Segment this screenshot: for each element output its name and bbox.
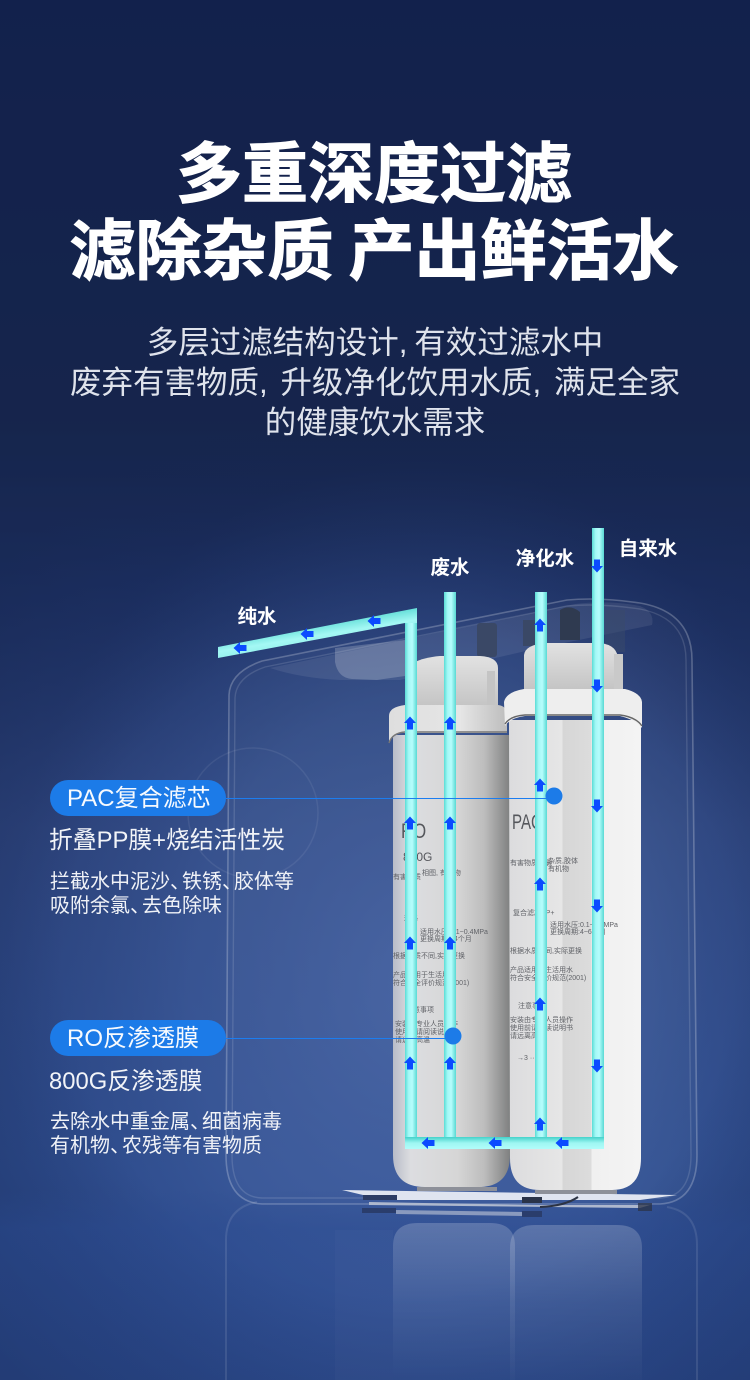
leader line (226, 1038, 447, 1040)
printed specification text: 更换周期:24个月 (420, 934, 472, 943)
callout: PAC filter (49, 780, 562, 917)
printed specification text (510, 856, 618, 1062)
tube: waste water (444, 592, 456, 1149)
marker dot (444, 1028, 462, 1044)
tube label: tap water: 自来水 (619, 532, 678, 561)
callout: RO membrane: 有机物、农残等有害物质 (50, 1134, 262, 1157)
tube label: waste water: 废水 (430, 551, 470, 580)
printed specification text: 杂质,胶体 (548, 856, 578, 865)
tube: purified water (535, 592, 547, 1149)
printed specification text: →1 (403, 1058, 414, 1065)
subtitle: 废弃有害物质, 升级净化饮用水质, 满足全家 (70, 364, 680, 400)
tube: pure water (218, 608, 417, 1149)
title: 滤除杂质 产出鲜活水 (70, 198, 678, 294)
filter: RO membrane cartridge (389, 656, 510, 1191)
printed specification text: 产品适用于生活用水 (510, 965, 573, 974)
printed specification text: 请远离高温 (510, 1031, 545, 1040)
subtitle: 的健康饮水需求 (265, 404, 485, 440)
subtitle: 多层过滤结构设计, 有效过滤水中 (147, 324, 603, 360)
subtitle (70, 324, 680, 440)
printed specification text: 安装由专业人员操作 (395, 1019, 458, 1028)
tube: tap water (592, 528, 604, 1149)
printed specification text: 注意事项 (406, 1005, 434, 1014)
floor reflection (226, 1202, 697, 1380)
printed specification text: 有害物质 (393, 872, 421, 881)
flow arrows (234, 560, 603, 1149)
filter: PAC composite cartridge (504, 643, 642, 1194)
printed specification text: 复合滤芯PP+ (513, 908, 554, 917)
printed specification text (393, 868, 488, 1065)
title (70, 121, 678, 294)
faint circle (188, 748, 318, 878)
RO label: RO (401, 820, 426, 844)
tube: bottom connector (405, 1137, 604, 1149)
printed specification text: 安装由专业人员操作 (510, 1015, 573, 1024)
base plate (342, 1190, 677, 1217)
marker dot (546, 788, 562, 804)
printed specification text: 请远离高温 (395, 1035, 430, 1044)
callout: RO membrane (49, 1020, 462, 1157)
PAC label: PAC (512, 809, 542, 834)
leader line (226, 798, 548, 800)
printed specification text: 使用前请阅读说明书 (395, 1027, 458, 1036)
printed specification text: 适用水压:0.1~0.4MPa (550, 920, 618, 929)
callout: PAC filter: 吸附余氯、去色除味 (50, 894, 222, 917)
description: 去除水中重金属、细菌病毒 (50, 1110, 282, 1133)
printed specification text: 根据水质不同,实际更换 (510, 946, 582, 955)
printed specification text: 规格 (404, 913, 418, 922)
printed specification text: 相图, 有机物 (422, 868, 461, 877)
printed specification text: 产品适用于生活用水 (393, 970, 456, 979)
callout: RO membrane: RO反渗透膜 (67, 1025, 199, 1052)
tube label: pure water: 纯水 (237, 600, 277, 629)
printed specification text: 根据水质不同,实际更换 (393, 951, 465, 960)
pill (50, 780, 226, 816)
pill (50, 1020, 226, 1056)
printed specification text: 适用水压:0.1~0.4MPa (420, 927, 488, 936)
callout: PAC filter: PAC复合滤芯 (67, 785, 211, 812)
printed specification text: 使用前请阅读说明书 (510, 1023, 573, 1032)
printed specification text: 更换周期:4~6个月 (550, 927, 606, 936)
800G label: 800G (403, 850, 432, 864)
purifier transparent case (188, 599, 697, 1204)
printed specification text: 符合安全评价规范(2001) (510, 973, 586, 982)
description: 拦截水中泥沙、铁锈、胶体等 (50, 870, 294, 893)
printed specification text: →3 ··· (517, 1055, 537, 1062)
printed specification text: 注意事项 (518, 1001, 546, 1010)
subheading: 800G反渗透膜 (49, 1068, 202, 1095)
title: 多重深度过滤 (176, 121, 572, 217)
printed specification text: 有机物 (548, 864, 569, 873)
water flow tubes (218, 528, 604, 1149)
translucent top cover (270, 602, 652, 680)
filter connectors (477, 607, 625, 657)
tube label: purified water: 净化水 (516, 542, 575, 571)
printed specification text: 符合安全评价规范(2001) (393, 978, 469, 987)
water tank shape (335, 640, 405, 680)
subheading: 折叠PP膜+烧结活性炭 (49, 827, 285, 854)
printed specification text: 有害物质余氯 (510, 858, 552, 867)
